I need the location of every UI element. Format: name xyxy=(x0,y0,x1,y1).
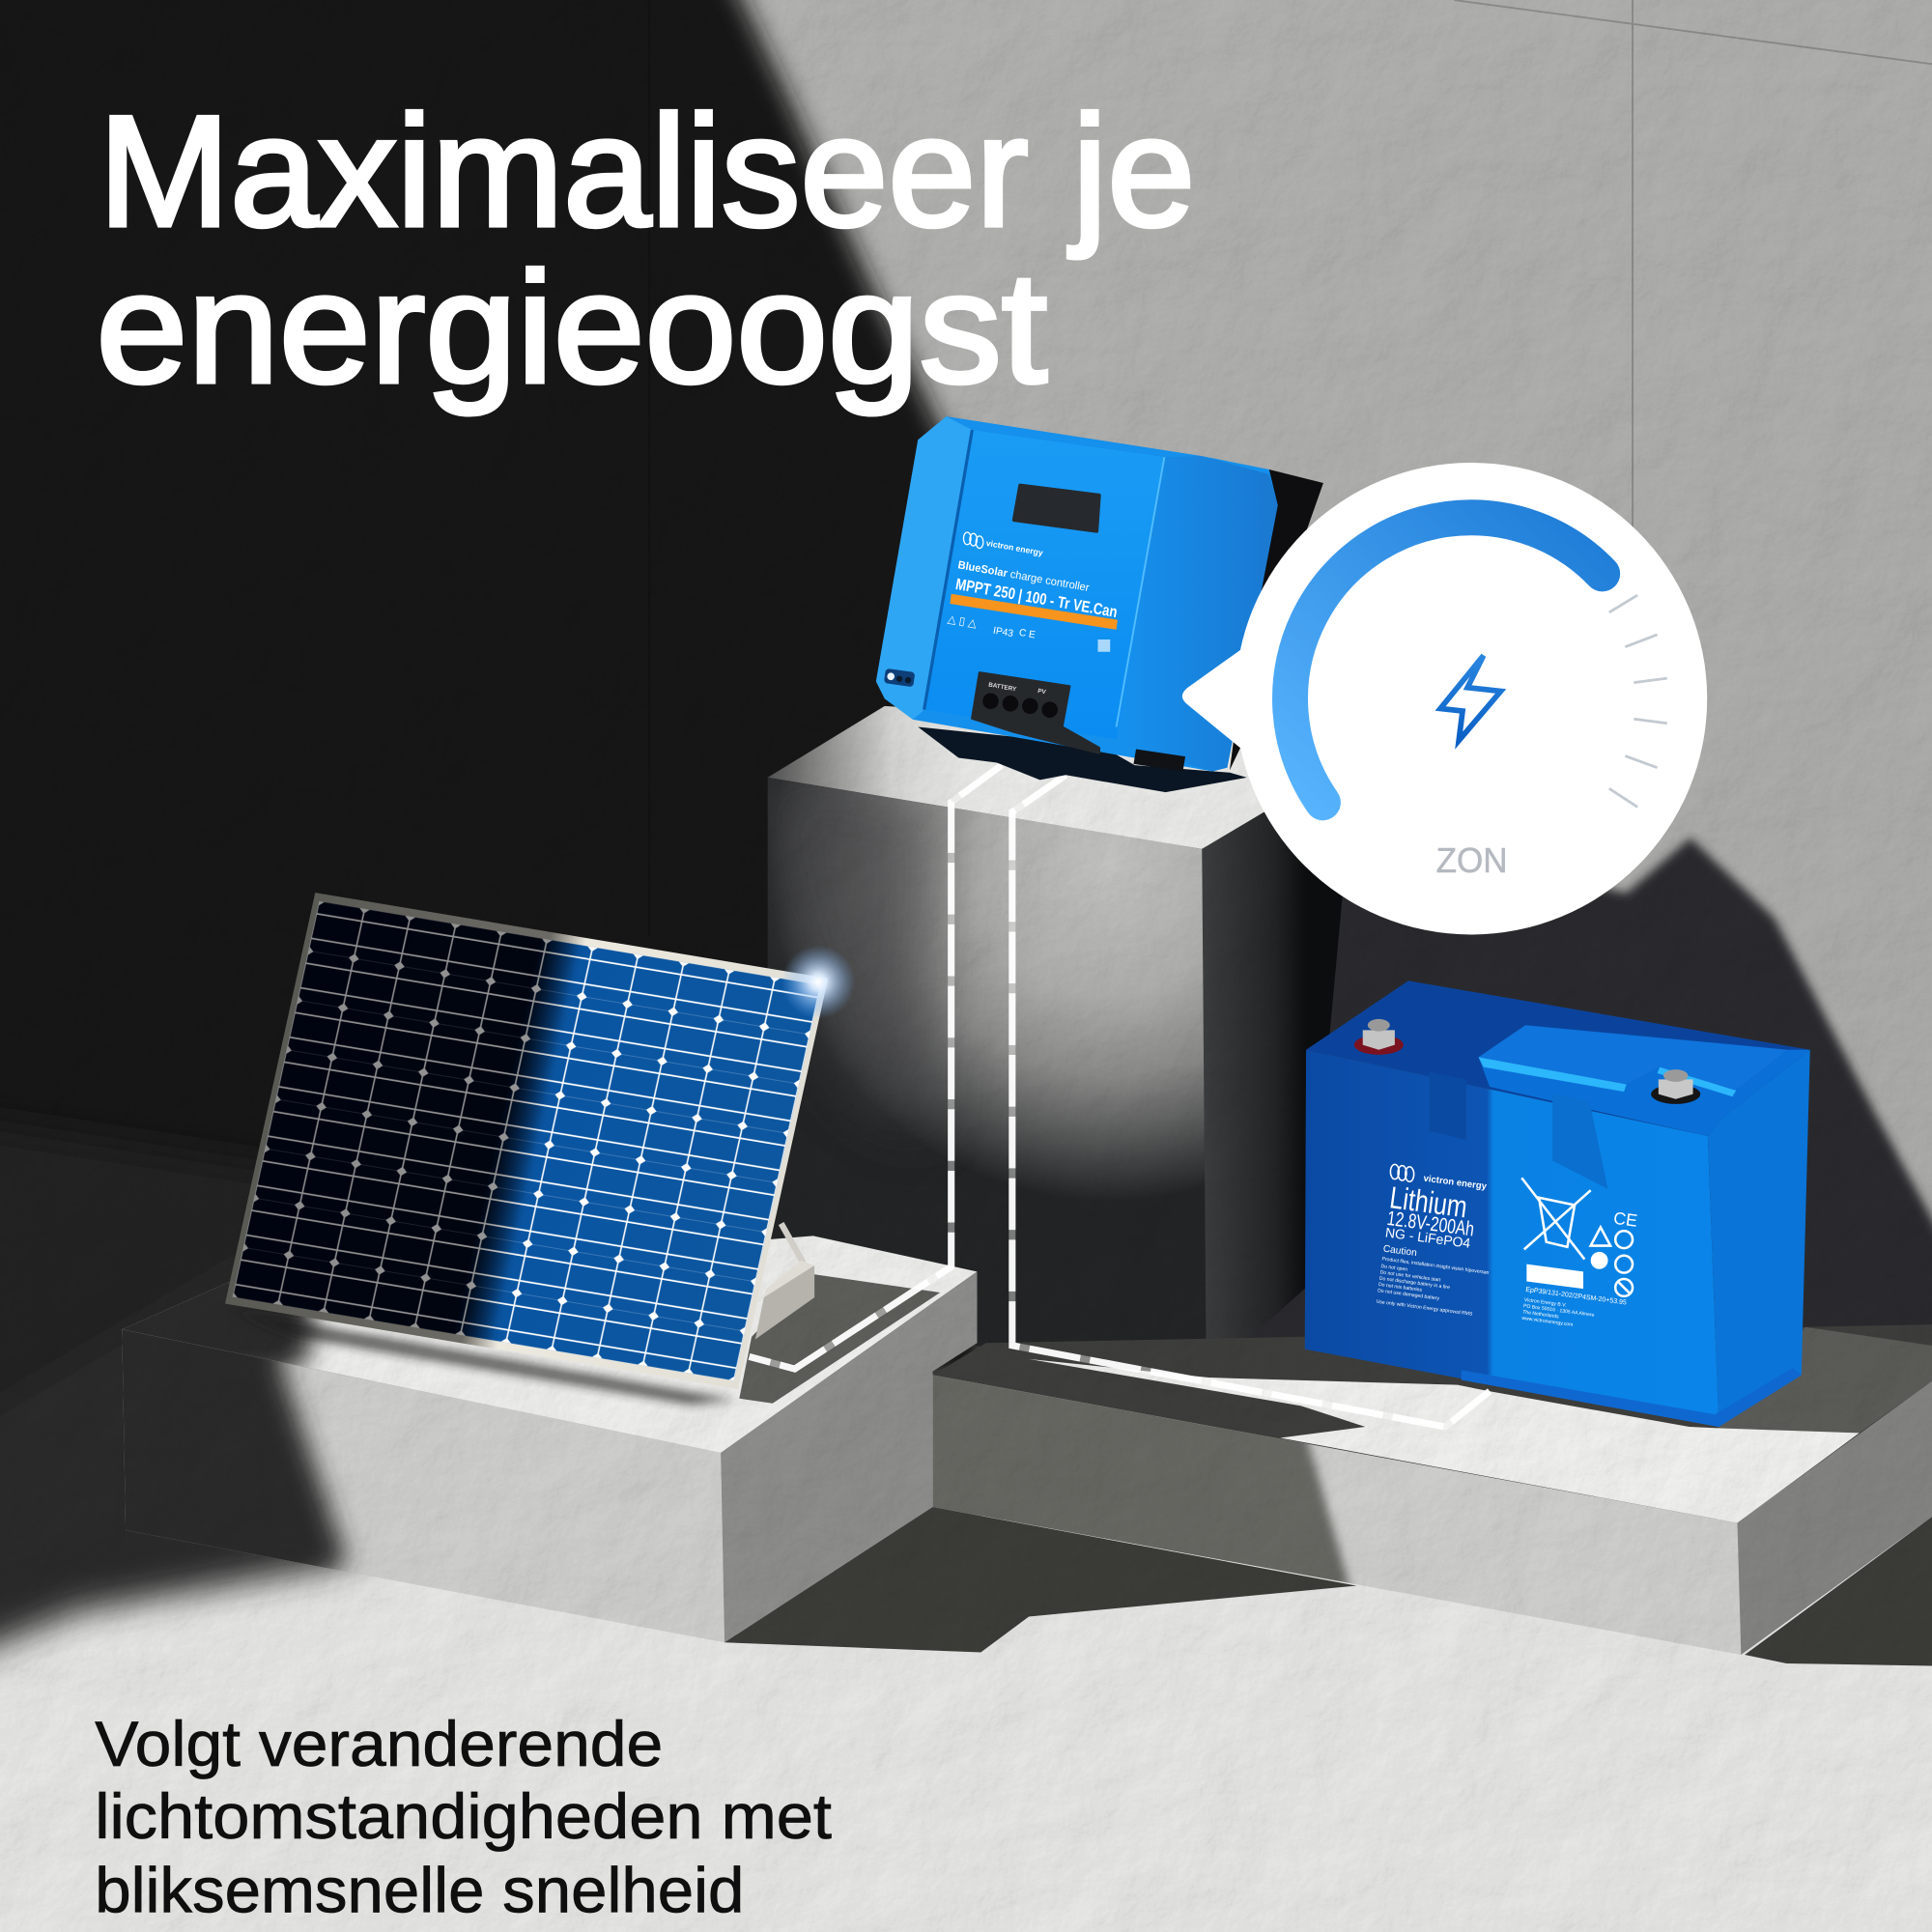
subtitle text block: bliksemsnelle snelheid xyxy=(95,1856,744,1927)
right block right face xyxy=(1737,1381,1932,1655)
solar panel xyxy=(225,893,855,1405)
controller orange bar xyxy=(950,594,1118,630)
controller front cover xyxy=(924,430,1164,739)
battery shadowed top xyxy=(1306,980,1810,1136)
battery labels: victron energy xyxy=(1423,1174,1488,1192)
battery logo mark xyxy=(1390,1164,1414,1181)
icon: lightning bolt xyxy=(1440,656,1501,741)
battery xyxy=(1305,980,1810,1427)
controller labels: △ ▯ △ xyxy=(947,613,978,630)
shadow on wall at right xyxy=(1182,788,1932,1368)
battery white label xyxy=(1526,1264,1583,1289)
battery notches xyxy=(1430,1072,1466,1140)
controller labels: MPPT 250 | 100 - Tr VE.Can xyxy=(954,575,1119,621)
battery labels: Do not discharge battery in a fire xyxy=(1378,1276,1450,1291)
subtitle text block: lichtomstandigheden met xyxy=(95,1781,832,1853)
battery base flange xyxy=(1462,1368,1802,1427)
controller side connector xyxy=(1133,750,1185,771)
battery labels: Do not open xyxy=(1380,1264,1408,1273)
controller right cover xyxy=(1117,456,1278,771)
gauge label: ZON xyxy=(1436,841,1508,880)
controller LEDs xyxy=(884,668,915,687)
panel glint xyxy=(781,945,855,1019)
cable: controller to battery xyxy=(1012,775,1490,1427)
cable: controller to solar panel xyxy=(750,765,1002,1369)
floor xyxy=(0,1479,1932,1932)
battery CE mark: CE xyxy=(1612,1208,1638,1231)
battery labels: Caution xyxy=(1382,1244,1417,1259)
right concrete block xyxy=(912,1324,1932,1655)
lit top face patch xyxy=(1029,1359,1860,1523)
pedestal left soft glow xyxy=(752,764,936,1133)
battery address text: PO Box 50016 · 1305 AA Almere xyxy=(1523,1303,1595,1319)
controller mount plate xyxy=(1230,469,1323,770)
right block shaded top face xyxy=(933,1324,1932,1523)
battery lit ledge xyxy=(1479,1050,1810,1136)
battery address text: Victron Energy B.V. xyxy=(1523,1297,1567,1309)
controller labels: C E xyxy=(1018,628,1037,641)
controller logo mark xyxy=(963,532,983,549)
battery labels: Do not use for vehicles start xyxy=(1379,1269,1441,1284)
gauge ticks xyxy=(1609,595,1667,807)
battery right side xyxy=(1708,1050,1810,1427)
controller labels: IP43 xyxy=(992,626,1014,639)
left block top face xyxy=(122,1236,977,1453)
dashed cables xyxy=(750,765,1490,1427)
pedestal front-left face xyxy=(768,778,1207,1377)
terminal: positive xyxy=(1354,1019,1404,1055)
battery address text: www.victronenergy.com xyxy=(1521,1316,1574,1328)
controller left side rim xyxy=(876,416,972,720)
controller connector box: BATTERY xyxy=(988,682,1017,694)
battery address text: EpP39/131-202/2P4SM-20+53.95 xyxy=(1525,1287,1627,1306)
terminal: negative xyxy=(1651,1069,1700,1104)
battery solid dot symbol xyxy=(1591,1252,1608,1269)
shadow on left block top xyxy=(49,1182,940,1404)
battery labels xyxy=(1376,1169,1501,1319)
controller labels xyxy=(946,534,1126,657)
battery labels: Product files, installation insight vision hipoversan xyxy=(1381,1256,1490,1276)
battery lid highlight xyxy=(1479,1057,1627,1092)
gauge arc xyxy=(1290,518,1603,803)
battery front xyxy=(1305,1050,1719,1427)
left block front face xyxy=(122,1329,724,1642)
wall shadow: large dark area at left xyxy=(0,0,1023,1380)
pedestal top face xyxy=(768,706,1392,849)
battery address text xyxy=(1521,1287,1627,1335)
controller underside shadow xyxy=(918,727,1247,792)
title xyxy=(96,82,1195,415)
battery lid xyxy=(1479,1025,1788,1091)
callout bubble tail xyxy=(1182,639,1257,761)
title: Maximaliseer je xyxy=(99,82,1195,259)
controller body xyxy=(876,416,1278,771)
battery labels: Do not mix batteries xyxy=(1378,1282,1423,1293)
controller seams xyxy=(924,430,1164,727)
left concrete block xyxy=(122,1236,978,1642)
battery labels: 12.8V-200Ah xyxy=(1386,1208,1475,1240)
title: energieoogst xyxy=(96,239,1047,415)
controller connector box: PV xyxy=(1037,688,1047,696)
battery address text: The Netherlands xyxy=(1522,1310,1559,1320)
wall seams xyxy=(649,0,1932,936)
cast shadows on floor xyxy=(724,1507,1932,1665)
charge controller xyxy=(876,416,1323,792)
controller labels: BlueSolar charge controller xyxy=(957,559,1091,594)
right block front face xyxy=(933,1375,1741,1655)
battery labels: NG - LiFePO4 xyxy=(1384,1224,1471,1251)
battery labels: Lithium xyxy=(1388,1179,1469,1224)
shadow right of battery xyxy=(1718,1327,1932,1433)
controller connector box xyxy=(972,672,1099,753)
battery recycle icon and symbols xyxy=(1521,1178,1633,1296)
callout: solar gauge xyxy=(1182,463,1707,934)
panel stand xyxy=(755,1224,814,1339)
pedestal right face xyxy=(1202,757,1355,1377)
subtitle text block: Volgt veranderende xyxy=(95,1709,663,1780)
battery labels: Do not use damaged battery xyxy=(1378,1288,1440,1302)
panel body xyxy=(225,893,828,1389)
dark floor at left xyxy=(0,1115,370,1673)
battery labels: Use only with Victron Energy approved RMS xyxy=(1376,1299,1473,1318)
left block right face xyxy=(721,1271,977,1642)
tall concrete pedestal xyxy=(767,705,1343,1347)
callout bubble xyxy=(1236,463,1707,934)
controller display plate xyxy=(1014,486,1099,531)
controller labels: victron energy xyxy=(985,538,1044,557)
subtitle text block xyxy=(95,1709,832,1927)
panel shadow on block xyxy=(234,1311,735,1405)
controller QR code xyxy=(1097,639,1110,652)
